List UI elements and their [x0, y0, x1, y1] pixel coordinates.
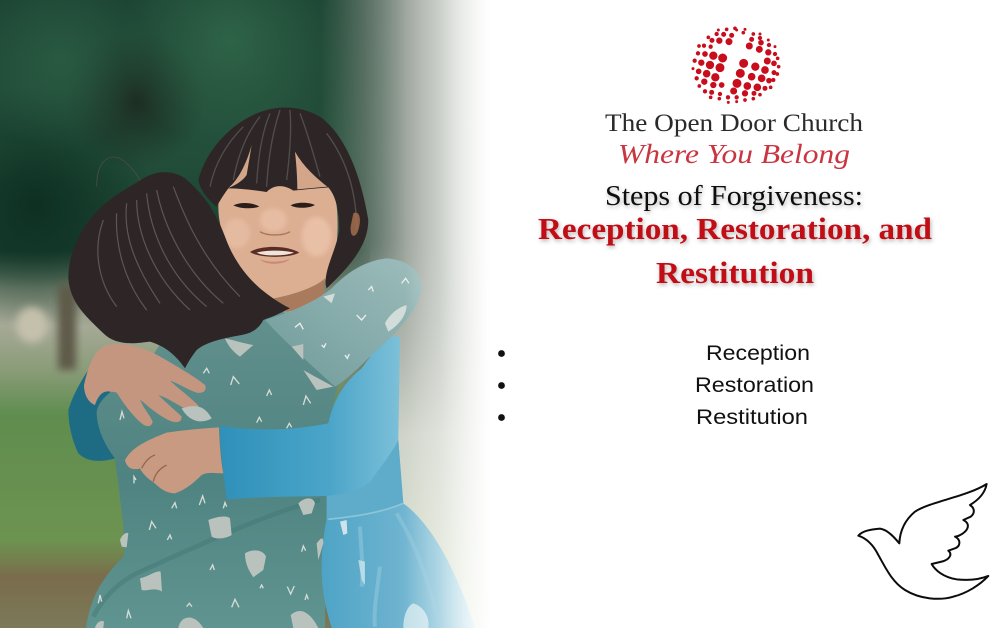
- sweater patterns: [95, 338, 333, 628]
- left child's hair: [68, 157, 290, 368]
- nose: [260, 232, 290, 235]
- heading: title in red: Reception, Restoration, and: [538, 211, 932, 246]
- photo background: blurred park: [0, 0, 491, 628]
- white fade to the page: [405, 0, 491, 628]
- heading: title in red: [538, 211, 932, 290]
- bullet: Restitution: [498, 405, 808, 429]
- left child's hand on the sweater: [84, 344, 206, 426]
- blue dress skirt: [322, 503, 475, 628]
- girl's blue sleeve and bodice: [220, 337, 403, 520]
- bullet list: [498, 341, 814, 429]
- logo: red dotted globe with cross: [692, 27, 780, 103]
- photo: two children hugging: [0, 0, 491, 628]
- bullet: Reception: [498, 341, 810, 365]
- heading: subtitle: Steps of Forgiveness:: [605, 181, 863, 212]
- bullet: Restoration: Restoration: [695, 373, 814, 397]
- icon: dove outline: [858, 484, 988, 599]
- left child's dark teal sleeve: [68, 360, 117, 461]
- bullet: Restoration: [498, 373, 814, 397]
- upper sweater sleeve around the girl's neck: [265, 258, 422, 387]
- logo: The Open Door Church: [605, 27, 864, 169]
- eyes: [233, 203, 315, 208]
- bullet: Restitution: Restitution: [696, 405, 808, 429]
- bullet: Reception: Reception: [706, 341, 810, 365]
- mouth: [250, 247, 299, 264]
- girl's face: [218, 147, 342, 312]
- sweater: child seen from behind: [86, 290, 338, 628]
- logo: tagline: Where You Belong: [618, 139, 850, 169]
- heading: title in red: Restitution: [656, 255, 814, 290]
- girl's hand holding the sweater: [125, 427, 223, 493]
- logo: church name: The Open Door Church: [605, 110, 864, 137]
- girl's hair: [198, 107, 368, 288]
